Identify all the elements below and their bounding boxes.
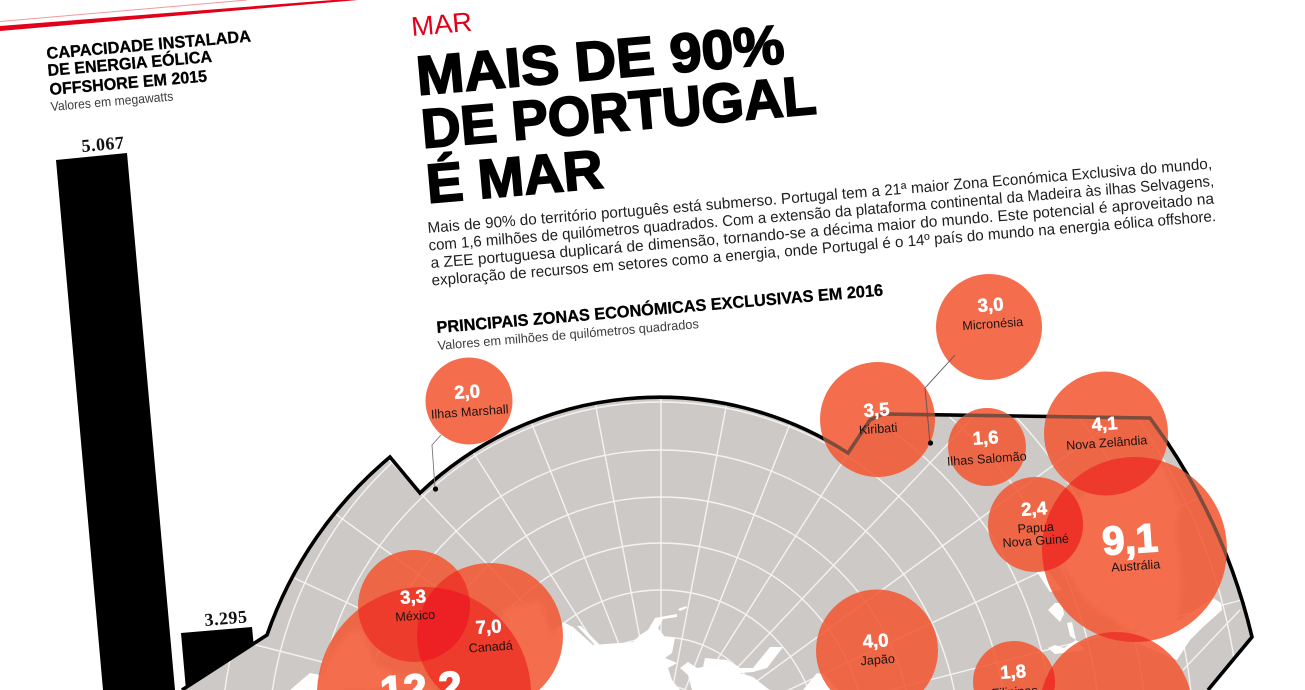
bubble circle: Ilhas Salomão — [948, 408, 1026, 486]
bubble overlaps — [358, 372, 1227, 690]
bubble label: Kiribati: Kiribati — [859, 421, 898, 437]
bubble circle: Japão — [816, 590, 938, 690]
bar chart heading: Valores em megawatts — [50, 88, 174, 114]
title: É MAR — [424, 138, 605, 215]
bubble circle: Estados Unidos — [317, 587, 531, 690]
bubble label: Micronésia: 3,0 — [977, 293, 1004, 316]
map outline — [182, 397, 1252, 690]
map heading: Valores em milhões de quilómetros quadrados — [437, 316, 700, 353]
bubble label: Ilhas Marshall: 2,0 — [453, 380, 481, 403]
value: 3.295: 3.295 — [204, 606, 248, 630]
bar: 5.067 — [56, 153, 175, 690]
map: world projection — [181, 395, 1254, 690]
value: 5.067: 5.067 — [81, 132, 125, 156]
map grid — [224, 399, 1240, 690]
bubble label: Kiribati — [859, 398, 898, 437]
bubble label: Papua Nova Guiné — [1002, 497, 1069, 550]
red header stripe — [0, 0, 358, 31]
bubble label: Ilhas Marshall: Ilhas Marshall — [430, 402, 509, 422]
bubble circle: Ilhas Marshall — [426, 358, 512, 444]
bubble label: Japão — [860, 629, 895, 668]
leader line: Micronésia — [925, 355, 955, 446]
bubble label: Canadá: 7,0 — [475, 615, 502, 638]
bubble label: Filipinas — [991, 660, 1038, 690]
bubble label: Papua Nova Guiné: Nova Guiné — [1002, 532, 1069, 550]
bubble label: Ilhas Marshall — [430, 380, 509, 422]
section tag: MAR: MAR — [410, 7, 473, 42]
bubble label: Micronésia — [962, 293, 1024, 333]
bubble label: México: México — [395, 608, 436, 624]
bubble label: Ilhas Salomão: 1,6 — [972, 426, 999, 449]
leader line: Ilhas Marshall — [432, 435, 441, 492]
map outline seen through bubbles — [822, 412, 1227, 560]
bubble circle: Canadá — [417, 563, 563, 690]
intro text block: Mais de 90% do território português está submerso. Portugal tem a 21ª maior Zona Económica Exclusiva do mundo, — [427, 156, 1213, 237]
bar chart heading — [46, 27, 252, 114]
bubble circle: Micronésia — [936, 274, 1042, 380]
bar chart heading: CAPACIDADE INSTALADA — [46, 27, 252, 63]
bubble label: Papua Nova Guiné: 2,4 — [1020, 497, 1048, 520]
bubble label: Nova Zelândia: 4,1 — [1091, 412, 1118, 435]
bar chart heading: DE ENERGIA EÓLICA — [47, 47, 213, 80]
bubble circle: Filipinas — [973, 641, 1055, 690]
map background — [182, 397, 1252, 690]
bubble circle: Kiribati — [820, 362, 935, 477]
bubble label: Micronésia: Micronésia — [962, 315, 1024, 333]
bar chart heading: OFFSHORE EM 2015 — [49, 67, 208, 99]
bubble label: Japão: 4,0 — [862, 629, 889, 652]
land masses — [290, 571, 1222, 690]
bubble label: Nova Zelândia: Nova Zelândia — [1066, 433, 1148, 453]
intro text block: com 1,6 milhões de quilómetros quadrados. Com a extensão da plataforma continental da Madeira às ilhas Selvagens, — [428, 173, 1215, 254]
bubble label: Filipinas: 1,8 — [999, 660, 1027, 683]
bubble circle: México — [358, 550, 470, 662]
bubble label: Nova Zelândia — [1066, 412, 1148, 453]
bubble label: México — [395, 585, 436, 624]
bar: 3.295 — [181, 627, 258, 690]
bubble label: Japão: Japão — [860, 652, 895, 668]
bubble label: Austrália: Austrália — [1111, 557, 1161, 575]
bubble circle: Nova Zelândia — [1044, 372, 1168, 496]
intro text block: a ZEE portuguesa duplicará de dimensão, tornando-se a décima maior do mundo. Este potencial é aproveitado na — [430, 191, 1215, 272]
bar chart: offshore wind capacity — [56, 153, 258, 690]
bubble label: Austrália: 9,1 — [1101, 516, 1159, 564]
bubble circle: Papua Nova Guiné — [988, 477, 1083, 572]
bubbles — [317, 274, 1227, 690]
title — [414, 13, 819, 215]
map heading: PRINCIPAIS ZONAS ECONÓMICAS EXCLUSIVAS EM 2016 — [436, 281, 884, 337]
bubble circle: Austrália — [1042, 457, 1227, 642]
title: DE PORTUGAL — [419, 64, 819, 160]
bubble label: Ilhas Salomão: Ilhas Salomão — [946, 449, 1027, 469]
bubble label: Papua Nova Guiné: Papua — [1017, 520, 1054, 536]
bubble label: México: 3,3 — [399, 585, 427, 608]
intro text block — [427, 156, 1217, 289]
bubble label: Canadá: Canadá — [468, 638, 513, 656]
bubble label: Kiribati: 3,5 — [863, 398, 890, 421]
bubble label: Ilhas Salomão — [946, 426, 1027, 469]
title: MAIS DE 90% — [414, 13, 787, 107]
intro text block: exploração de recursos em setores como a energia, onde Portugal é o 14º país do mundo na energia eólica offshore. — [431, 208, 1217, 289]
bubble label: Canadá — [468, 615, 513, 656]
land under bubbles — [320, 464, 1182, 690]
bubble circle: Indonésia — [1040, 632, 1192, 690]
